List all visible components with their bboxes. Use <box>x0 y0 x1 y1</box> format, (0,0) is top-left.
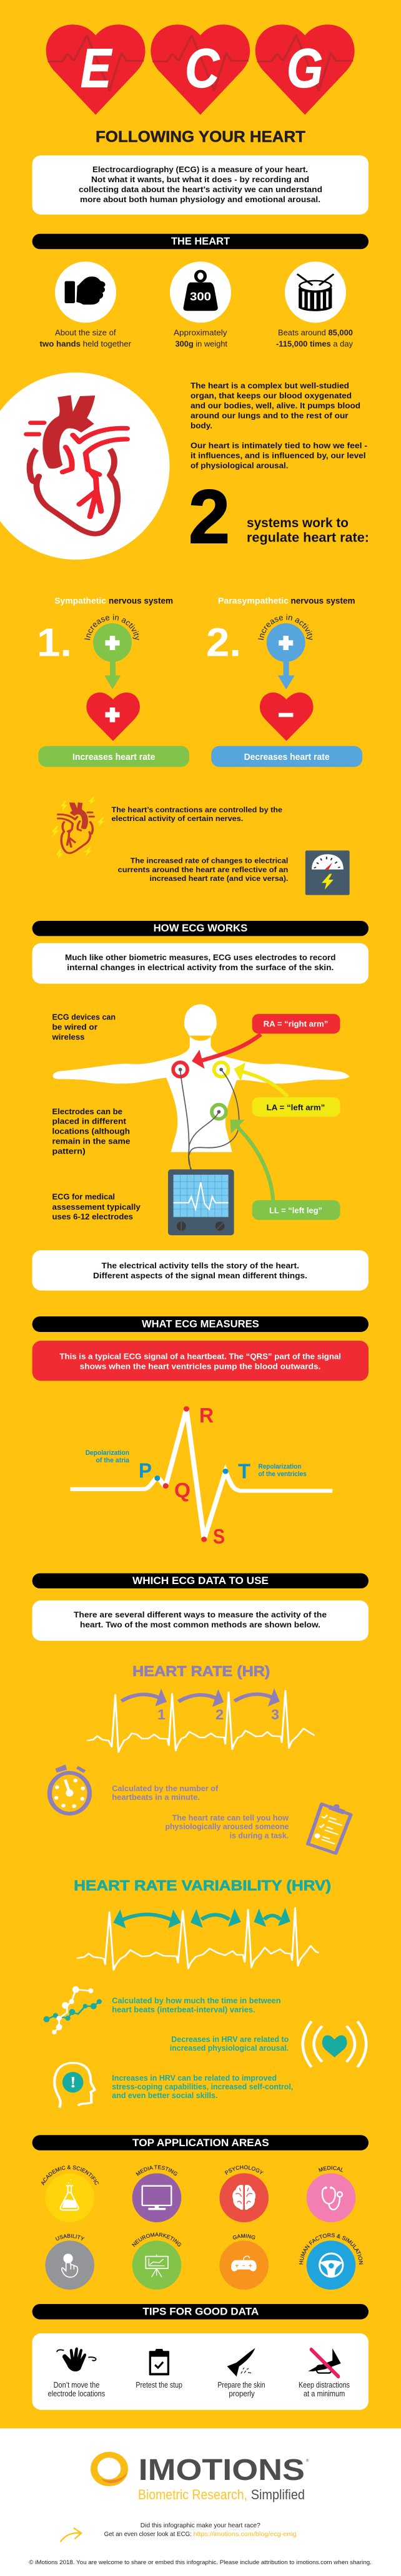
icon: brush <box>227 2348 255 2376</box>
tip: pretest the setup: Pretest the stup <box>136 2380 182 2389</box>
application: usability <box>45 2233 94 2290</box>
icon: fist <box>55 261 116 323</box>
two systems heading: systems work to <box>247 516 349 530</box>
callout: electrical activity of nerves: The heart’s contractions are controlled by the <box>111 805 282 814</box>
chart: PQRST waveform: R <box>199 1404 214 1427</box>
heart description text: body. <box>191 421 212 430</box>
label: left arm: LA = “left arm” <box>267 1103 325 1112</box>
footer <box>0 2428 401 2576</box>
icon: heart plus <box>86 693 140 741</box>
fact: beats per day: -115,000 times a day <box>276 339 353 348</box>
ECG hearts title: C <box>185 37 220 99</box>
number 2: 2. <box>206 620 241 665</box>
label: left leg <box>252 1200 340 1220</box>
logo: IMOTIONS <box>139 2454 305 2487</box>
pill: increases heart rate <box>38 746 189 767</box>
application: media testing <box>132 2165 181 2222</box>
callout: interbeat interval: heart beats (interbeat-interval) varies. <box>112 2006 255 2015</box>
tip: keep distractions minimum <box>299 2348 350 2398</box>
chart: PQRST waveform: T <box>238 1459 250 1482</box>
icon: stopwatch <box>49 1764 89 1814</box>
label: right arm: RA = “right arm” <box>264 1019 328 1029</box>
icon: brain <box>232 2185 255 2210</box>
icon: stethoscope <box>322 2187 342 2210</box>
chart: heart rate beats: 1 <box>157 1706 166 1723</box>
callout: electrical activity of nerves: electrical activity of certain nerves. <box>111 814 243 823</box>
text: electrode placement <box>52 1107 130 1155</box>
text: number of electrodes: uses 6-12 electrodes <box>52 1212 133 1222</box>
curved label: increase in activity: Increase in activity <box>258 614 312 640</box>
chart: PQRST waveform: P <box>139 1459 152 1482</box>
text: electrode placement: Electrodes can be <box>52 1107 122 1116</box>
section bar: which ECG data to use <box>32 1573 369 1588</box>
icon: hand <box>57 2348 96 2371</box>
panel: ECG introduction: Much like other biometric measures, ECG uses electrodes to record <box>65 953 336 962</box>
callout: electrical currents and heart rate: increased heart rate (and vice versa). <box>150 874 288 883</box>
tip: prepare the skin: Prepare the skin <box>217 2380 265 2389</box>
electrode: yellow <box>214 1062 229 1077</box>
pill: decreases heart rate: Decreases heart rate <box>244 752 330 762</box>
section bar: top application areas <box>32 2135 369 2151</box>
chart: PQRST waveform: of the ventricles <box>259 1470 307 1478</box>
text: electrode placement: locations (although <box>52 1127 130 1136</box>
callout: interbeat interval <box>44 1986 281 2034</box>
heart description text: it influences, and is influenced by, our level <box>191 451 366 460</box>
section bar: how ECG works: HOW ECG WORKS <box>154 923 247 934</box>
icon: clipboard <box>308 1804 351 1854</box>
panel: typical ECG signal: shows when the heart ventricles pump the blood outwards. <box>80 1362 320 1371</box>
icon: gamepad <box>231 2256 257 2272</box>
callout: increases in HRV: Increases in HRV can be related to improved <box>112 2074 277 2083</box>
fact: 300g weight <box>170 261 231 348</box>
callout: calculated by heartbeats <box>49 1764 219 1814</box>
chart: heart rate beats: 3 <box>271 1706 279 1723</box>
section bar: which ECG data to use: WHICH ECG DATA TO USE <box>132 1575 269 1587</box>
text: electrode placement: remain in the same <box>52 1137 130 1145</box>
section bar: tips for good data <box>32 2304 369 2320</box>
intro panel: Electrocardiography (ECG) is a measure of your heart. <box>92 165 308 174</box>
intro panel: collecting data about the heart’s activity we can understand <box>79 185 322 194</box>
icon: heart with lightning bolts <box>51 797 104 860</box>
icon: steering wheel <box>320 2253 343 2277</box>
arrow: left leg <box>230 1120 273 1200</box>
heart description text: Our heart is intimately tied to how we feel - <box>191 441 367 450</box>
icon: plus circle with arrow <box>267 623 305 689</box>
text: number of electrodes <box>52 1192 141 1222</box>
tip: pretest the setup <box>136 2349 182 2389</box>
number 1: 1. <box>37 620 72 665</box>
tip: electrode locations <box>48 2348 106 2398</box>
curved label: increase in activity: Increase in activity <box>84 614 139 640</box>
icon: drum <box>285 261 346 323</box>
callout: physiological arousal during task: physiologically aroused someone <box>165 1822 289 1831</box>
electrode: red <box>173 1062 187 1077</box>
two systems heading <box>189 474 369 559</box>
heading: heart rate: HEART RATE (HR) <box>132 1663 270 1679</box>
panel: sympathetic system <box>37 595 189 767</box>
call to action: https://imotions.com/blog/ecg-emg <box>194 2530 297 2538</box>
heading: parasympathetic: Parasympathetic <box>218 595 289 605</box>
fact: beats per day: Beats around 85,000 <box>278 328 353 337</box>
panel: electrical activity story: The electrical activity tells the story of the heart. <box>101 1261 299 1270</box>
logo ring <box>91 2452 128 2486</box>
callout: increases in HRV <box>54 2063 293 2107</box>
callout: calculated by heartbeats: heartbeats in a minute. <box>112 1793 200 1802</box>
chart: PQRST waveform: Q <box>174 1479 191 1502</box>
tip: prepare the skin: properly <box>229 2389 255 2398</box>
application: academic and scientific <box>41 2165 99 2222</box>
callout: interbeat interval: Calculated by how much the time in between <box>112 1996 281 2005</box>
callout: physiological arousal during task: The heart rate can tell you how <box>172 1814 289 1822</box>
fact: beats per day <box>276 261 353 348</box>
application: media testing: MEDIA TESTING <box>136 2165 177 2176</box>
label: left leg: LL = “left leg” <box>269 1205 322 1215</box>
application: neuromarketing <box>132 2232 181 2290</box>
section bar: the heart: THE HEART <box>171 236 230 247</box>
fact: 300g weight: Approximately <box>174 328 227 337</box>
heading: parasympathetic: nervous system <box>291 595 355 605</box>
callout: increases in HRV: and even better social skills. <box>112 2091 217 2100</box>
call to action: Did this infographic make your heart race? <box>141 2522 260 2529</box>
chart: heart rate beats: 2 <box>215 1706 224 1723</box>
callout: electrical currents and heart rate: The increased rate of changes to electrical <box>131 856 288 865</box>
application: medical: MEDICAL <box>319 2166 343 2172</box>
text: wired or wireless <box>51 1013 116 1042</box>
heart description text: The heart is a complex but well-studied <box>191 381 349 391</box>
callout: decreases in HRV: Decreases in HRV are related to <box>171 2035 289 2044</box>
subtitle: FOLLOWING YOUR HEART <box>96 129 305 146</box>
logo: Simplified <box>251 2487 305 2502</box>
heading: heart rate variability: HEART RATE VARIABILITY (HRV) <box>74 1877 331 1893</box>
application: human factors and simulation <box>299 2233 364 2290</box>
chart: PQRST waveform <box>71 1404 332 1548</box>
chart: heart rate variability beats <box>77 1908 319 1970</box>
pill: increases heart rate: Increases heart rate <box>72 752 155 762</box>
panel: parasympathetic system <box>206 595 362 767</box>
application: gaming <box>219 2233 269 2290</box>
label: left arm <box>252 1097 340 1117</box>
body silhouette <box>53 1004 350 1152</box>
chart: heart rate beats <box>87 1688 315 1752</box>
section bar: what ECG measures <box>32 1316 369 1332</box>
icon: head with exclamation <box>54 2063 94 2107</box>
callout: physiological arousal during task: is during a task. <box>230 1832 289 1840</box>
section bar: the heart <box>32 234 369 249</box>
tip: prepare the skin <box>217 2348 265 2398</box>
heart description text: organ, that keeps our blood oxygenated <box>191 391 352 401</box>
intro panel: more about both human physiology and emotional arousal. <box>80 195 320 204</box>
icon: muted trumpet <box>308 2348 341 2376</box>
application: gaming: GAMING <box>232 2233 255 2240</box>
ECG hearts title <box>46 24 355 115</box>
heading: sympathetic: nervous system <box>109 595 173 605</box>
text: number of electrodes: ECG for medical <box>52 1192 115 1202</box>
section bar: tips for good data: TIPS FOR GOOD DATA <box>142 2306 259 2318</box>
two systems heading: 2 <box>189 474 230 559</box>
section bar: how ECG works <box>32 921 369 936</box>
panel: electrical activity story <box>32 1250 369 1291</box>
heart description text <box>191 381 367 470</box>
application: neuromarketing: NEUROMARKETING <box>132 2232 181 2247</box>
tip: electrode locations: Don’t move the <box>54 2380 99 2389</box>
icon: clipboard check <box>149 2349 169 2375</box>
application: academic and scientific: ACADEMIC & SCIENTIFIC <box>41 2165 99 2186</box>
fact: size of two hands: two hands held together <box>40 339 132 348</box>
logo: ® <box>306 2459 309 2463</box>
electrode wires <box>181 1069 239 1169</box>
section bar: top application areas: TOP APPLICATION AREAS <box>132 2137 269 2149</box>
logo: Biometric Research, <box>138 2487 247 2502</box>
application: human factors and simulation: HUMAN FACTORS & SIMULATION <box>299 2233 364 2265</box>
panel: measuring methods <box>32 1600 369 1641</box>
heading: parasympathetic <box>218 595 355 605</box>
fact: 300g weight: 300g in weight <box>175 339 227 348</box>
panel: measuring methods: There are several different ways to measure the activity of the <box>74 1610 327 1620</box>
logo <box>91 2452 309 2502</box>
icon: variability network <box>44 1986 102 2034</box>
intro panel <box>32 155 369 215</box>
callout: calculated by heartbeats: Calculated by the number of <box>112 1784 219 1793</box>
chart: PQRST waveform: S <box>213 1525 225 1548</box>
ECG monitor device <box>168 1169 234 1235</box>
tip: keep distractions minimum: Keep distractions <box>299 2380 350 2389</box>
heart description text: around our lungs and to the rest of our <box>191 411 349 420</box>
chart: PQRST waveform: Repolarization <box>259 1463 302 1470</box>
ECG hearts title: G <box>287 37 323 99</box>
text: electrode placement: placed in different <box>52 1117 127 1126</box>
callout: decreases in HRV: increased physiological arousal. <box>170 2044 289 2053</box>
icon: touch hand <box>62 2253 77 2277</box>
chart: PQRST waveform: of the atria <box>96 1457 130 1464</box>
call to action <box>104 2522 297 2538</box>
heading: sympathetic: Sympathetic <box>54 595 106 605</box>
section bar: what ECG measures: WHAT ECG MEASURES <box>142 1318 259 1329</box>
panel: electrical activity story: Different aspects of the signal mean different things. <box>93 1271 307 1280</box>
callout: decreases in HRV <box>170 2021 366 2067</box>
two systems heading: regulate heart rate: <box>247 531 369 545</box>
callout: electrical currents and heart rate <box>118 850 350 895</box>
callout: increases in HRV: stress-coping capabilities, increased self-control, <box>112 2083 293 2091</box>
text: wired or wireless: ECG devices can <box>52 1013 116 1022</box>
icon: flask <box>61 2179 79 2210</box>
application: medical <box>306 2166 356 2222</box>
icon: heart signal <box>303 2021 366 2067</box>
pill: decreases heart rate <box>211 746 362 767</box>
application: usability: USABILITY <box>55 2233 85 2241</box>
fact: size of two hands <box>40 261 132 348</box>
heart description text: of physiological arousal. <box>191 461 288 470</box>
icon: monitor <box>142 2186 171 2210</box>
panel: tips <box>32 2333 369 2410</box>
callout: electrical activity of nerves <box>51 797 282 860</box>
panel: typical ECG signal <box>32 1341 369 1381</box>
text: electrode placement: pattern) <box>52 1146 86 1155</box>
callout: electrical currents and heart rate: currents around the heart are reflective of an <box>118 865 288 874</box>
panel: ECG introduction: internal changes in electrical activity from the surface of the skin. <box>67 963 334 972</box>
text: wired or wireless: wireless <box>51 1033 85 1042</box>
text: wired or wireless: be wired or <box>52 1023 97 1032</box>
icon: gauge <box>305 850 350 895</box>
application: psychology: PSYCHOLOGY <box>225 2165 264 2175</box>
body diagram with electrodes <box>53 1004 350 1235</box>
icon: heart minus <box>260 693 314 741</box>
callout: physiological arousal during task <box>165 1804 351 1854</box>
electrode: green <box>212 1105 226 1119</box>
tip: keep distractions minimum: at a minimum <box>304 2389 345 2398</box>
big heart anatomy illustration <box>0 372 170 560</box>
call to action: Get an even closer look at ECG: <box>104 2530 192 2538</box>
heart description text: and our bodies, well, alive. It pumps blood <box>191 401 360 411</box>
chart: PQRST waveform: Depolarization <box>86 1449 129 1457</box>
tip: electrode locations: electrode locations <box>48 2389 106 2398</box>
icon: chart easel <box>146 2254 168 2277</box>
intro panel: Not what it wants, but what it does - by recording and <box>91 175 309 184</box>
label: right arm <box>252 1014 340 1034</box>
heading: sympathetic <box>54 595 173 605</box>
arrow: left arm <box>234 1062 288 1097</box>
panel: measuring methods: heart. Two of the most common methods are shown below. <box>80 1620 320 1630</box>
arrow to link <box>61 2528 81 2542</box>
panel: typical ECG signal: This is a typical ECG signal of a heartbeat. The “QRS” part of the signal <box>59 1352 341 1361</box>
application: psychology <box>219 2165 269 2222</box>
icon: plus circle with arrow <box>93 623 132 689</box>
ECG hearts title: E <box>81 37 112 99</box>
panel: ECG introduction <box>32 943 369 984</box>
fact: size of two hands: About the size of <box>55 328 116 337</box>
icon: weight: 300 <box>190 290 211 303</box>
text: number of electrodes: assessement typically <box>52 1202 141 1212</box>
arrow: right arm <box>192 1034 261 1069</box>
copyright: © iMotions 2018. You are welcome to share or embed this infographic. Please include attribution to imotions.com when sharing. <box>29 2559 372 2565</box>
